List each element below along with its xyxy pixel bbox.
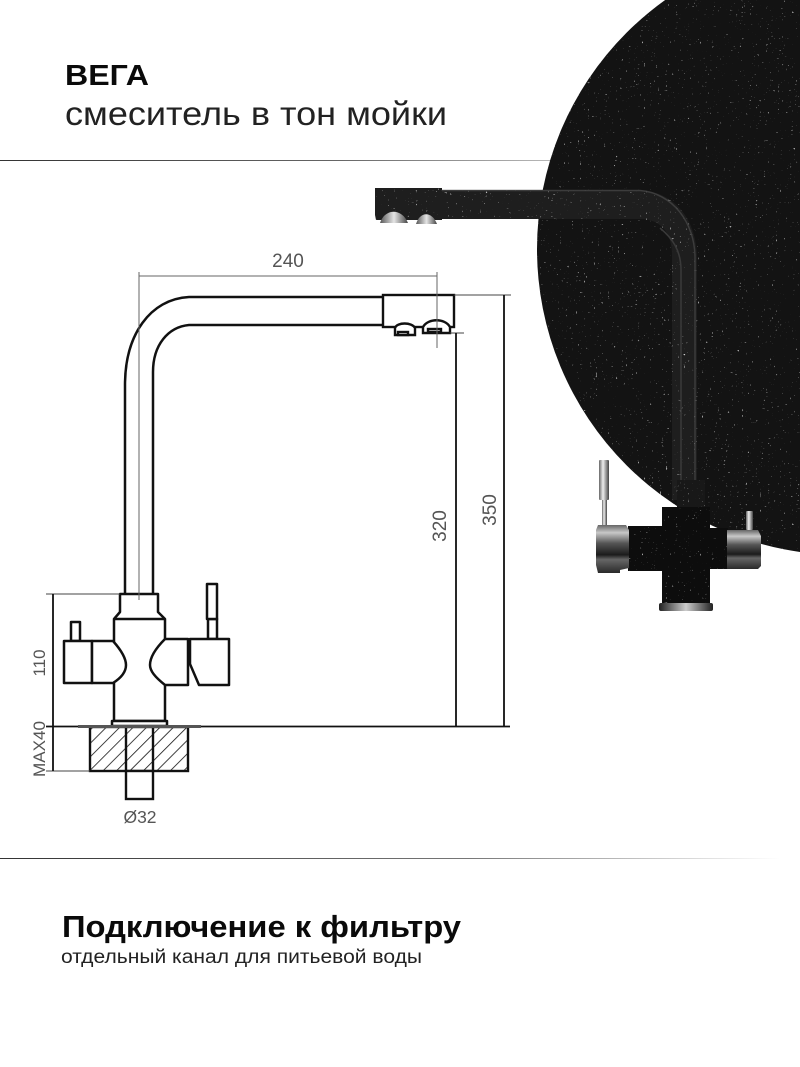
dimension 350: 350 [480,494,501,526]
faucet body [628,480,728,603]
spout outline [125,297,383,594]
technical drawing of faucet [30,251,511,827]
subtitle: смеситель в тон мойки [65,95,447,132]
dimension lines [46,272,511,771]
faucet body and handles [64,584,229,726]
dimension MAX40: MAX40 [30,721,49,777]
title: ВЕГА [65,60,149,92]
feature heading: Подключение к фильтру [62,909,462,944]
faucet spout and stem [375,188,697,500]
product photo: black faucet [375,188,761,611]
dimension 240: 240 [272,251,304,272]
chrome nozzles [380,212,437,224]
right chrome handle with lever [727,511,761,569]
dimension diameter 32: Ø32 [123,807,157,827]
stem highlights [442,190,695,480]
bottom divider line [0,858,780,859]
top divider line [0,160,560,161]
dimension 320: 320 [430,510,451,542]
black granite circle [537,0,800,555]
dimension 110: 110 [30,649,49,677]
left chrome handle with lever [596,460,629,573]
countertop section hatch [90,727,188,799]
feature description: отдельный канал для питьевой воды [61,947,422,968]
spout head with nozzles [383,295,454,335]
chrome base ring [659,603,713,611]
